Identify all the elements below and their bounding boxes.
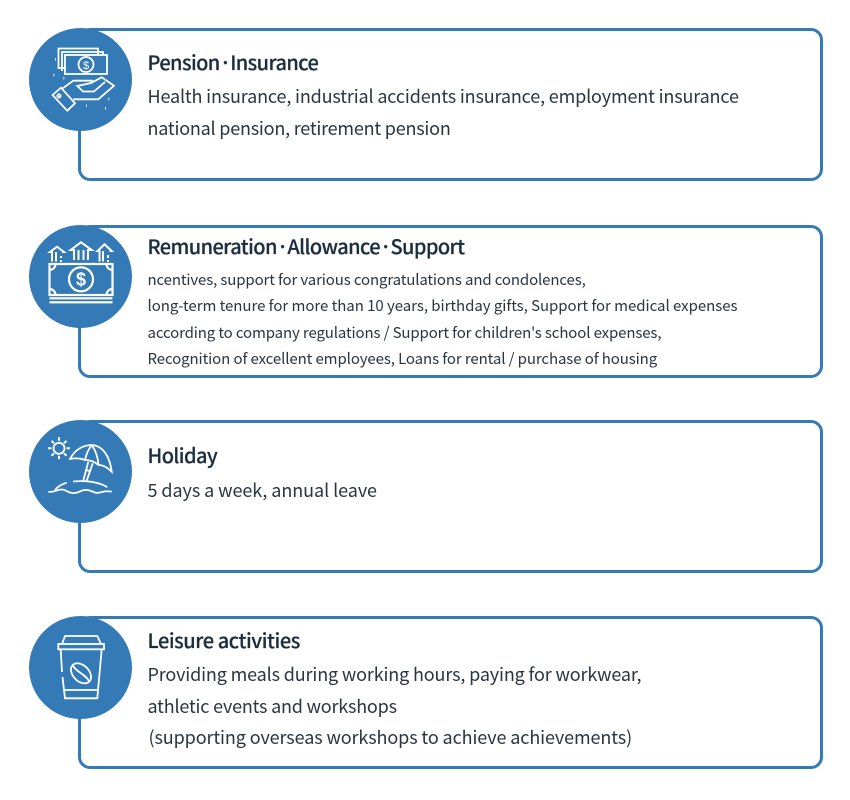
icon: banknote with houses (29, 225, 132, 328)
text: holiday details: 5 days a week, annual leave (148, 477, 377, 503)
icon: banknote with houses: $ (76, 270, 86, 290)
panel: remuneration (78, 225, 823, 378)
text: remuneration list: according to company regulations / Support for children's school expenses, (148, 322, 661, 343)
text: remuneration list: Recognition of excellent employees, Loans for rental / purchase of housing (148, 348, 657, 369)
icon: money over hand (29, 28, 132, 131)
heading: remuneration: · (277, 231, 288, 260)
text: leisure list: Providing meals during working hours, paying for workwear, (148, 661, 641, 687)
icon: beach umbrella (29, 420, 132, 523)
text: insurance list: national pension, retirement pension (148, 114, 451, 140)
heading: pension insurance: Pension Insurance (148, 47, 318, 76)
heading: holiday: Holiday (148, 440, 217, 469)
icon: coffee cup (29, 616, 132, 719)
text: leisure list: athletic events and workshops (148, 692, 397, 718)
text: remuneration list: ncentives, support for various congratulations and condolences, (148, 269, 586, 290)
text: leisure list: (supporting overseas workshops to achieve achievements) (148, 724, 632, 750)
panel: holiday (78, 420, 823, 573)
text: remuneration list (148, 269, 737, 369)
icon: money over hand: $ (83, 60, 89, 72)
text: remuneration list: long-term tenure for more than 10 years, birthday gifts, Support for medical expenses (148, 295, 737, 316)
panel: leisure activities (78, 616, 823, 769)
heading: leisure activities: Leisure activities (148, 625, 300, 654)
heading: remuneration: Remuneration Allowance Support (148, 231, 464, 260)
text: insurance list (148, 83, 739, 140)
heading: remuneration: · (380, 231, 391, 260)
heading: pension insurance: · (220, 47, 231, 76)
text: leisure list (148, 661, 641, 750)
panel: pension and insurance (78, 28, 823, 181)
text: insurance list: Health insurance, industrial accidents insurance, employment insurance (148, 83, 739, 109)
